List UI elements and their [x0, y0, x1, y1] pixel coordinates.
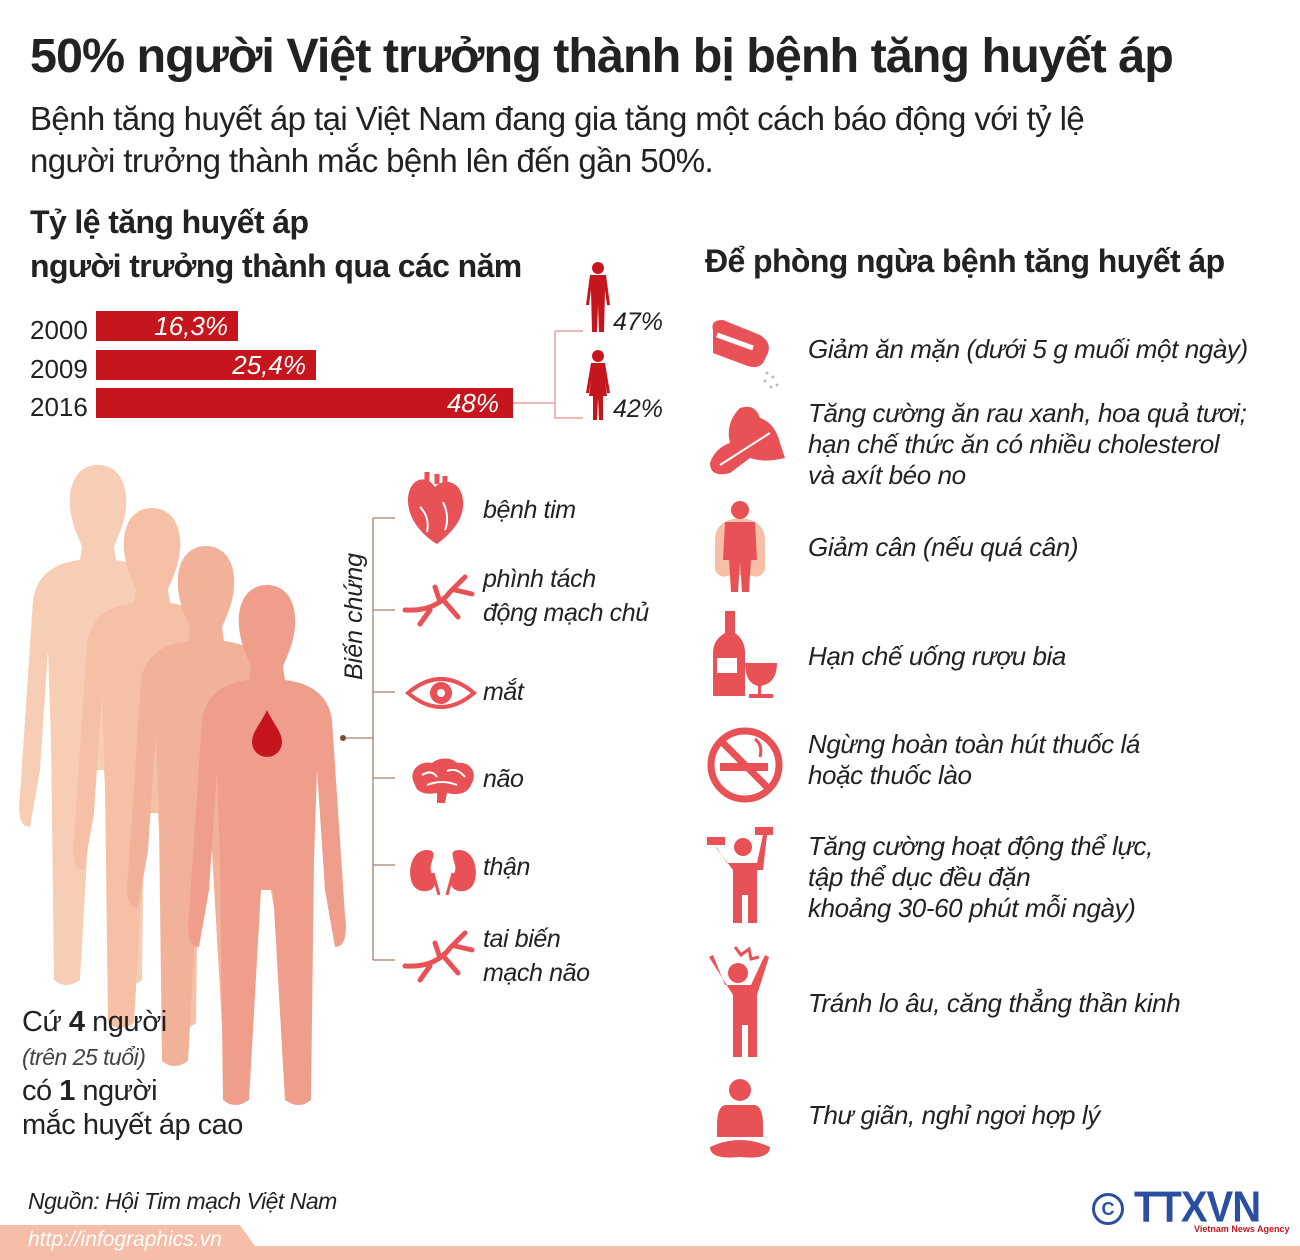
body text: Cứ 4 người [22, 1006, 167, 1038]
chart heading: Tỷ lệ tăng huyết áp [30, 204, 308, 240]
prevention item: exercise: khoảng 30-60 phút mỗi ngày) [808, 893, 1135, 923]
bar chart: 16,3% [154, 311, 228, 341]
subtitle: Bệnh tăng huyết áp tại Việt Nam đang gia tăng một cách báo động với tỷ lệ [30, 100, 1084, 137]
complication: aorta [402, 565, 649, 627]
complication: stroke: mạch não [483, 959, 590, 987]
bar chart: 2009 [30, 354, 88, 384]
complication: stroke: tai biến [483, 925, 560, 953]
prevention item: alcohol [713, 611, 1066, 698]
body text: (trên 25 tuổi) [22, 1044, 145, 1070]
label: Biến chứng: Biến chứng [340, 553, 368, 680]
body text: có 1 người [22, 1075, 157, 1107]
prevention item: exercise [707, 827, 1153, 923]
complication: kidneys [410, 850, 530, 896]
complication: eye [405, 676, 525, 710]
body text [22, 1006, 243, 1141]
prevention heading: Để phòng ngừa bệnh tăng huyết áp [705, 243, 1225, 279]
source: Nguồn: Hội Tim mạch Việt Nam [28, 1188, 337, 1214]
title: 50% người Việt trưởng thành bị bệnh tăng huyết áp [30, 29, 1173, 83]
chart heading: người trưởng thành qua các năm [30, 248, 522, 284]
complication: brain: não [483, 765, 524, 793]
logo TTXVN: Vietnam News Agency [1194, 1224, 1290, 1234]
prevention item: vegetables: Tăng cường ăn rau xanh, hoa quả tươi; [808, 398, 1246, 428]
prevention item: no smoking: hoặc thuốc lào [808, 760, 972, 790]
prevention item: no smoking [708, 728, 1140, 802]
complication: brain [412, 758, 524, 803]
bodies: four human silhouettes [19, 465, 346, 1105]
prevention item: no smoking: Ngừng hoàn toàn hút thuốc lá [808, 729, 1140, 759]
icon: woman 42%: 42% [613, 395, 663, 423]
prevention item: stress: Tránh lo âu, căng thẳng thần kinh [808, 988, 1180, 1018]
prevention item: weight [715, 501, 1078, 592]
logo TTXVN: C [1102, 1199, 1114, 1219]
prevention item: vegetables: và axít béo no [808, 460, 966, 490]
complication: eye: mắt [483, 678, 523, 706]
complication: aorta: động mạch chủ [483, 599, 649, 627]
chart heading [30, 204, 522, 284]
icon: woman 42% [586, 350, 663, 423]
complication: kidneys: thận [483, 853, 530, 881]
bar chart: 2000 [30, 315, 88, 345]
body text: mắc huyết áp cao [22, 1109, 243, 1141]
logo TTXVN [1092, 1183, 1290, 1234]
bar chart: 25,4% [232, 350, 306, 380]
bar chart [30, 311, 583, 422]
complication: stroke [402, 925, 590, 987]
footer bar [0, 1225, 1300, 1260]
prevention item: relax: Thư giãn, nghỉ ngơi hợp lý [808, 1100, 1100, 1130]
complication: heart: bệnh tim [483, 496, 576, 524]
prevention item: alcohol: Hạn chế uống rượu bia [808, 641, 1066, 671]
prevention item: stress [709, 946, 1180, 1057]
footer bar: http://infographics.vn [28, 1228, 222, 1251]
subtitle: người trưởng thành mắc bệnh lên đến gần 50%. [30, 142, 713, 179]
icon: man 47% [586, 262, 663, 336]
prevention item: salt: Giảm ăn mặn (dưới 5 g muối một ngày) [808, 334, 1248, 364]
prevention item: vegetables: hạn chế thức ăn có nhiều cholesterol [808, 429, 1219, 459]
prevention item: relax [710, 1079, 1102, 1158]
prevention item: weight: Giảm cân (nếu quá cân) [808, 532, 1078, 562]
bar chart: 2016 [30, 392, 88, 422]
bar chart: 48% [447, 388, 499, 418]
prevention item: salt [712, 320, 1248, 388]
prevention item: exercise: tập thể dục đều đặn [808, 862, 1030, 892]
complication: aorta: phình tách [483, 565, 596, 593]
prevention item: exercise: Tăng cường hoạt động thể lực, [808, 831, 1153, 861]
subtitle [30, 100, 1084, 179]
prevention item: vegetables [710, 398, 1246, 490]
complication: heart [408, 472, 576, 544]
icon: man 47%: 47% [613, 308, 663, 336]
complications bracket [340, 517, 395, 961]
logo TTXVN: TTXVN [1134, 1183, 1260, 1231]
